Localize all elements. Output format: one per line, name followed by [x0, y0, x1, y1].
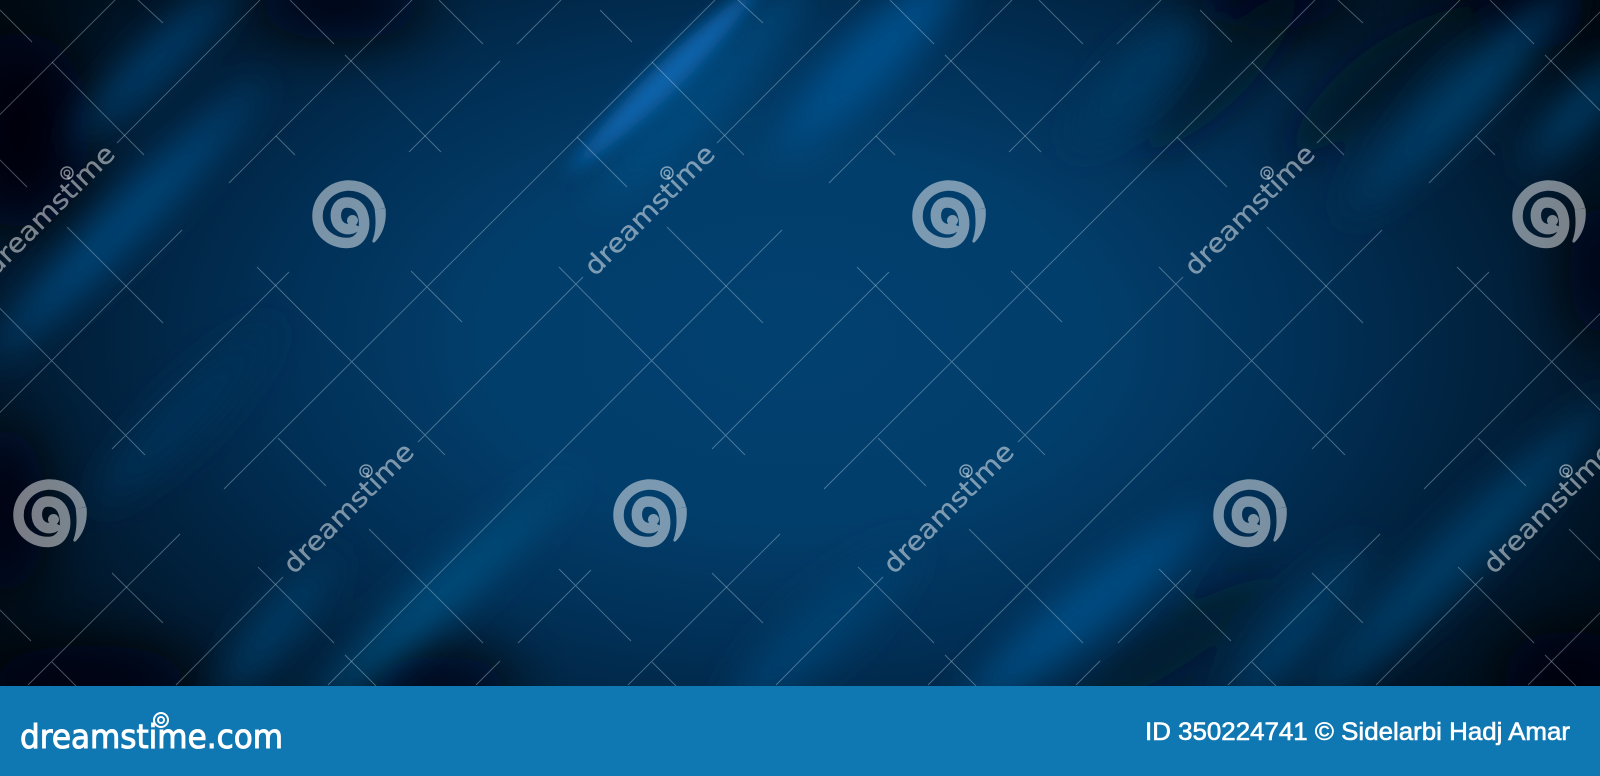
watermark text row two: dreamstime — [878, 437, 1021, 580]
footer credit: ID 350224741 © Sidelarbi Hadj Amar — [1145, 718, 1570, 746]
footer logo: dreamstime.com — [20, 717, 283, 756]
watermark text row one: dreamstime — [1179, 139, 1322, 282]
watermark spiral row two — [18, 484, 1287, 542]
watermark text row one: dreamstime — [579, 139, 722, 282]
watermark small spirals — [61, 167, 1572, 477]
watermark text row two — [278, 437, 1600, 580]
watermark spiral row one — [318, 185, 1586, 243]
watermark text row two: dreamstime — [278, 437, 421, 580]
watermark text row one — [0, 139, 1322, 282]
footer band — [0, 686, 1600, 776]
